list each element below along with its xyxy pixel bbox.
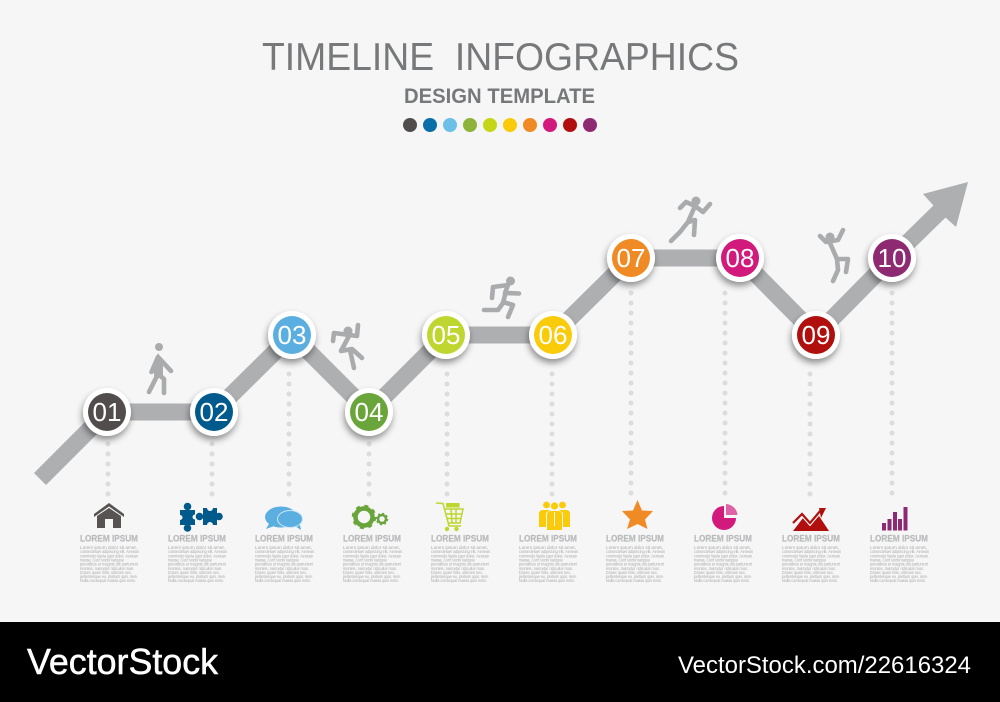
icon: people group [539,502,570,530]
figure: runner two [671,196,710,241]
figure: walker [149,343,171,393]
icon: house [94,503,124,528]
node 08 [716,234,764,282]
text block 5: LOREM IPSUM [431,534,489,544]
text block 2 [168,534,227,583]
node 06: 06 [539,320,567,350]
text block 2: LOREM IPSUM [168,534,226,544]
node 06 [529,311,577,359]
node 09: 09 [802,320,830,350]
node 03 [268,311,316,359]
dotted connector lines [108,293,892,495]
text block 4 [343,534,402,583]
icon: mountain chart [793,508,829,531]
text block 8: LOREM IPSUM [694,534,752,544]
icon: gears [353,506,388,528]
text block 6 [519,534,578,583]
text block 7: LOREM IPSUM [606,534,664,544]
icon: star [622,500,653,529]
text block 7 [606,534,665,583]
icon: bar chart [882,507,908,530]
colour dots row [403,118,597,132]
icon: speech bubbles [265,506,302,530]
node 07: 07 [617,243,645,273]
text block 3 [255,534,314,583]
title: TIMELINE INFOGRAPHICS [262,36,739,79]
footer bar [0,622,1000,702]
node 02 [190,388,238,436]
node 07 [607,234,655,282]
text block 5 [431,534,490,583]
text block 1 [80,534,139,583]
text block 9 [782,534,841,583]
text block 10 [870,534,929,583]
text block 8 [694,534,753,583]
figure: falling person [333,325,362,368]
node 04 [345,388,393,436]
node 04: 04 [355,397,383,427]
figure: runner one [484,276,519,317]
node 09 [792,311,840,359]
subtitle: DESIGN TEMPLATE [404,84,595,108]
node 08: 08 [726,243,754,273]
figure: jumper [820,230,848,281]
node 10: 10 [878,243,906,273]
text block 3: LOREM IPSUM [255,534,313,544]
text block 4: LOREM IPSUM [343,534,401,544]
text block 9: LOREM IPSUM [782,534,840,544]
text block 1: LOREM IPSUM [80,534,138,544]
icon: puzzle pieces [178,503,223,532]
node 01 [83,388,131,436]
node 05 [422,311,470,359]
node 03: 03 [278,320,306,350]
node 10 [868,234,916,282]
node 01: 01 [93,397,121,427]
text block 6: LOREM IPSUM [519,534,577,544]
node 02: 02 [200,397,228,427]
footer url: VectorStock.com/22616324 [678,652,971,679]
footer logo: VectorStock [27,641,219,682]
icon: shopping cart [436,503,463,531]
node 05: 05 [432,320,460,350]
timeline arrow [40,182,968,479]
icon: pie chart [712,504,738,530]
text block 10: LOREM IPSUM [870,534,928,544]
